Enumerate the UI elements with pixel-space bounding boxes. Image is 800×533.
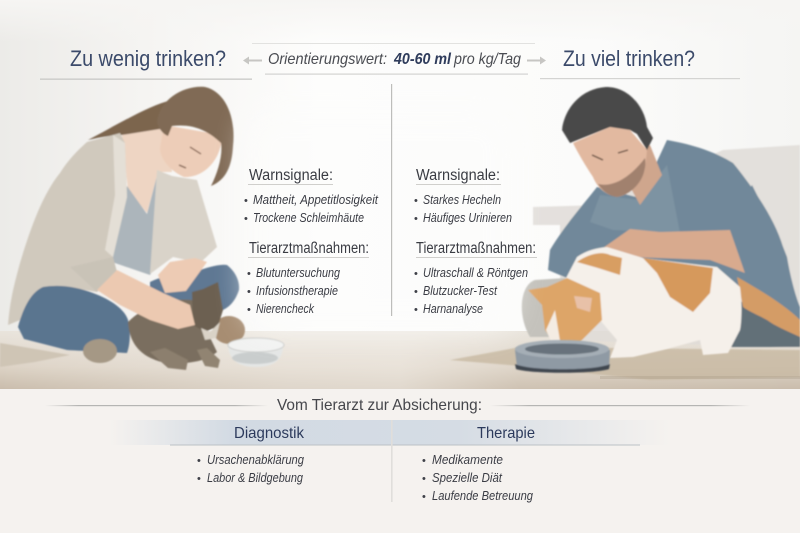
photo: man with orange and white cat: [522, 87, 800, 358]
list: warning signs: [244, 192, 379, 225]
heading: warning signs: Warnsignale:: [416, 167, 500, 184]
jeans right leg: [150, 265, 239, 325]
value: 40-60 ml: [393, 51, 451, 68]
center divider: [391, 84, 392, 316]
shoe: [213, 316, 245, 344]
list: vet measures: Blutuntersuchung: [256, 265, 341, 280]
list: warning signs: •: [244, 213, 248, 225]
eye and mouth: [179, 147, 201, 168]
column: therapy: •: [422, 455, 426, 467]
list: vet measures: Harnanalyse: [423, 301, 483, 316]
unit: pro kg/Tag: [453, 51, 521, 68]
list: vet measures: •: [247, 286, 251, 298]
list: warning signs: Mattheit, Appetitlosigkeit: [253, 192, 379, 207]
heading: vet measures: Tierarztmaßnahmen:: [416, 240, 536, 257]
trousers: [730, 300, 800, 347]
tabby cat paws: [150, 348, 188, 370]
list: warning signs: •: [414, 213, 418, 225]
heading: too much: Zu viel trinken?: [563, 46, 695, 71]
face: [573, 127, 647, 197]
cardigan shading: [105, 135, 127, 257]
list: vet measures: Nierencheck: [256, 301, 315, 316]
hair: [562, 87, 653, 150]
list: vet measures: •: [414, 304, 418, 316]
list: vet measures: [247, 265, 341, 316]
photo: woman with tabby cat: [8, 87, 245, 370]
knee: [522, 278, 565, 337]
column: diagnostics: Diagnostik: [234, 425, 305, 442]
tail: [737, 277, 800, 337]
panel: right signs: [414, 167, 537, 316]
list: warning signs: •: [244, 195, 248, 207]
cat body: [565, 247, 742, 358]
header band: [110, 420, 670, 445]
sleeve: [730, 185, 787, 277]
ponytail: [88, 100, 172, 140]
list: vet measures: •: [247, 304, 251, 316]
right cardigan panel: [150, 170, 217, 274]
column: therapy: Spezielle Diät: [432, 470, 503, 485]
sofa: [533, 145, 800, 348]
face: [160, 125, 222, 177]
heading: too little: Zu wenig trinken?: [70, 46, 226, 71]
column: therapy: Medikamente: [432, 452, 503, 467]
column: therapy: Therapie: [477, 425, 535, 442]
column: diagnostics: [197, 425, 305, 485]
column: diagnostics: Labor & Bildgebung: [207, 470, 304, 485]
arrow left: [243, 56, 262, 64]
background wall: [0, 0, 800, 340]
heading: vet measures: Tierarztmaßnahmen:: [249, 240, 369, 257]
list: vet measures: [414, 265, 528, 316]
heading: warning signs: Warnsignale:: [249, 167, 333, 184]
column: therapy: Laufende Betreuung: [432, 488, 534, 503]
arrow right: [527, 56, 546, 64]
panel: left signs: [244, 167, 379, 316]
section title: Vom Tierarzt zur Absicherung:: [277, 397, 482, 414]
list: vet measures: Ultraschall & Röntgen: [423, 265, 528, 280]
list: vet measures: •: [414, 268, 418, 280]
list: warning signs: Trockene Schleimhäute: [253, 210, 364, 225]
list: vet measures: Infusionstherapie: [256, 283, 338, 298]
orientation value banner: [243, 43, 546, 75]
reference text: Orientierungswert:: [268, 51, 387, 68]
left cardigan panel: [8, 133, 127, 325]
panel: bottom veterinary section: [0, 389, 800, 533]
arm: [603, 229, 745, 273]
column: therapy: [422, 425, 535, 503]
column: diagnostics: •: [197, 455, 201, 467]
floor: [0, 331, 800, 390]
water bowl: glass: [228, 338, 284, 367]
tabby cat head: [192, 282, 223, 332]
food bowl: [515, 340, 610, 373]
list: warning signs: •: [414, 195, 418, 207]
sleeve cuff: [70, 257, 117, 292]
list: vet measures: •: [414, 286, 418, 298]
arms and hands: [97, 270, 195, 329]
undershirt: [112, 172, 158, 275]
list: warning signs: Häufiges Urinieren: [423, 210, 512, 225]
column: therapy: •: [422, 491, 426, 503]
foot: [83, 339, 117, 363]
column: diagnostics: •: [197, 473, 201, 485]
neck: [622, 145, 662, 205]
list: vet measures: Blutzucker-Test: [423, 283, 498, 298]
list: warning signs: [414, 192, 512, 225]
soft white fade behind central text: [244, 110, 514, 330]
orange patches: [577, 253, 622, 275]
column: diagnostics: Ursachenabklärung: [207, 452, 305, 467]
list: warning signs: Starkes Hecheln: [423, 192, 501, 207]
cat head: [528, 278, 602, 347]
list: vet measures: •: [247, 268, 251, 280]
neck and chest: [122, 128, 172, 213]
beard: [598, 158, 645, 197]
sweater: [548, 140, 800, 322]
eye: [592, 150, 628, 160]
column: therapy: •: [422, 473, 426, 485]
tabby cat body: [128, 300, 217, 364]
sweater chest shade: [590, 165, 680, 233]
hair: [157, 87, 234, 186]
jeans left leg: [18, 286, 130, 353]
